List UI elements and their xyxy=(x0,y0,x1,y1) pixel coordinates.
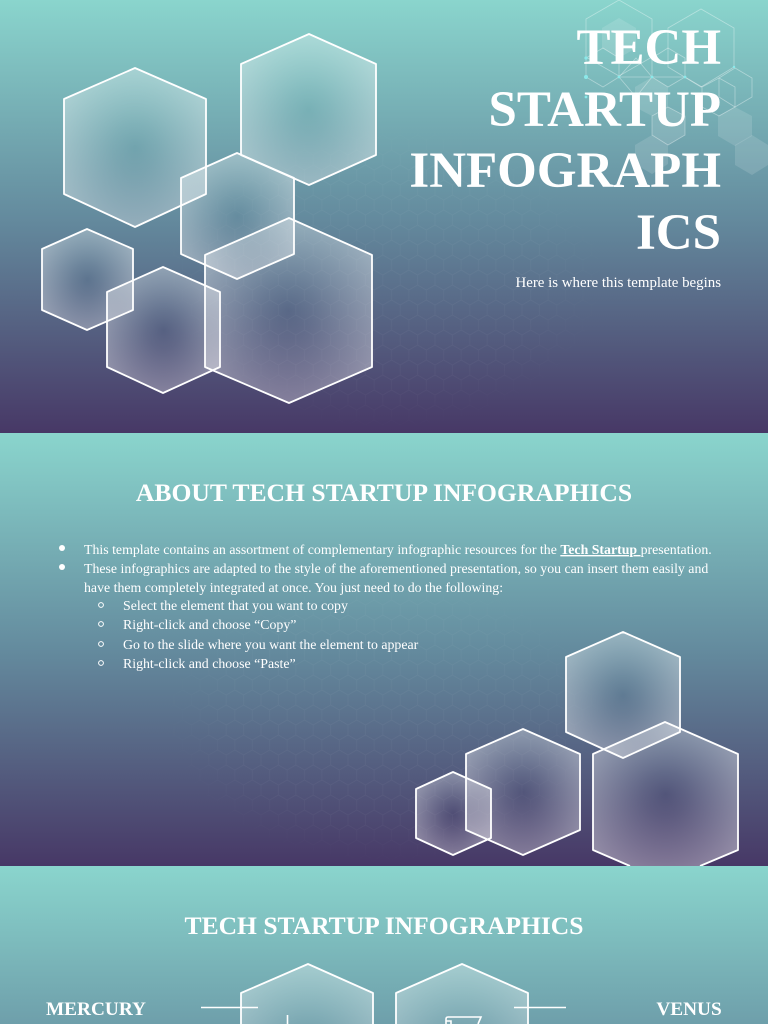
heading: ABOUT TECH STARTUP INFOGRAPHICS xyxy=(136,478,632,507)
bullet list: Select the element that you want to copy xyxy=(123,598,348,613)
icon: mercury xyxy=(286,1015,288,1024)
connector lines xyxy=(201,1006,566,1008)
glass hexagon cluster xyxy=(416,632,738,866)
label: venus: VENUS xyxy=(656,999,722,1020)
panel: cover slide xyxy=(0,0,768,433)
bullet list: Right-click and choose “Paste” xyxy=(123,656,296,671)
slide background xyxy=(0,433,768,866)
panel: infographic slide xyxy=(0,866,768,1024)
bullet list: Go to the slide where you want the element to appear xyxy=(123,637,419,652)
title: TECH xyxy=(576,20,721,76)
title: INFOGRAPH xyxy=(409,143,721,199)
hexagon: mercury xyxy=(241,964,373,1024)
panel: about slide xyxy=(0,433,768,866)
bullet list: Right-click and choose “Copy” xyxy=(123,617,296,632)
hexagon: venus xyxy=(396,964,528,1024)
honeycomb texture xyxy=(160,570,610,866)
bullet list: This template contains an assortment of complementary infographic resources for the Tech Startup presentation. xyxy=(84,542,712,557)
honeycomb texture xyxy=(160,120,610,433)
bullet list: have them completely integrated at once. You just need to do the following: xyxy=(84,580,503,595)
bullet list xyxy=(59,542,712,671)
slide background xyxy=(0,866,768,1024)
title: ICS xyxy=(636,205,721,261)
glass hexagon cluster xyxy=(42,34,376,403)
title: STARTUP xyxy=(489,82,721,138)
network hexagons decoration xyxy=(584,0,768,175)
bullet list: These infographics are adapted to the style of the aforementioned presentation, so you can insert them easily and xyxy=(84,561,708,576)
title xyxy=(409,20,721,261)
label: mercury: MERCURY xyxy=(46,999,146,1020)
subtitle: Here is where this template begins xyxy=(515,275,721,291)
heading: TECH STARTUP INFOGRAPHICS xyxy=(185,911,583,940)
icon: venus scroll xyxy=(446,1017,481,1024)
slide background xyxy=(0,0,768,433)
